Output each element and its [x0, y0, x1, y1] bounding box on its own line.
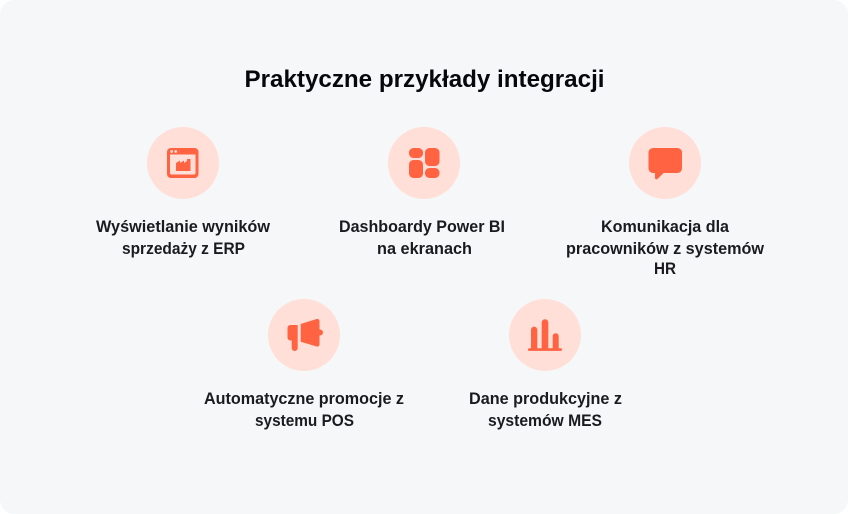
icon: speech bubble — [629, 127, 701, 199]
label: MES production data: Dane produkcyjne z — [469, 390, 622, 408]
label: MES production data: systemów MES — [488, 412, 602, 430]
label: ERP sales results: sprzedaży z ERP — [122, 240, 245, 258]
item: MES production data — [469, 299, 622, 430]
label: HR communication: pracowników z systemów — [566, 240, 764, 258]
item: HR communication — [566, 127, 764, 278]
label: HR communication: HR — [654, 260, 676, 278]
label: Power BI dashboards: na ekranach — [377, 240, 472, 258]
label: POS promotions: systemu POS — [255, 412, 354, 430]
icon: bar chart — [509, 299, 581, 371]
label: ERP sales results: Wyświetlanie wyników — [96, 218, 270, 236]
icon: browser window with factory — [147, 127, 219, 199]
icon: megaphone — [268, 299, 340, 371]
item: POS promotions — [204, 299, 404, 430]
label: POS promotions: Automatyczne promocje z — [204, 390, 404, 408]
item: Power BI dashboards — [339, 127, 505, 258]
icon: dashboard tiles — [388, 127, 460, 199]
label: HR communication: Komunikacja dla — [601, 218, 730, 236]
item: ERP sales results — [96, 127, 270, 258]
label: Power BI dashboards: Dashboardy Power BI — [339, 218, 505, 236]
title: Praktyczne przykłady integracji — [244, 66, 604, 93]
